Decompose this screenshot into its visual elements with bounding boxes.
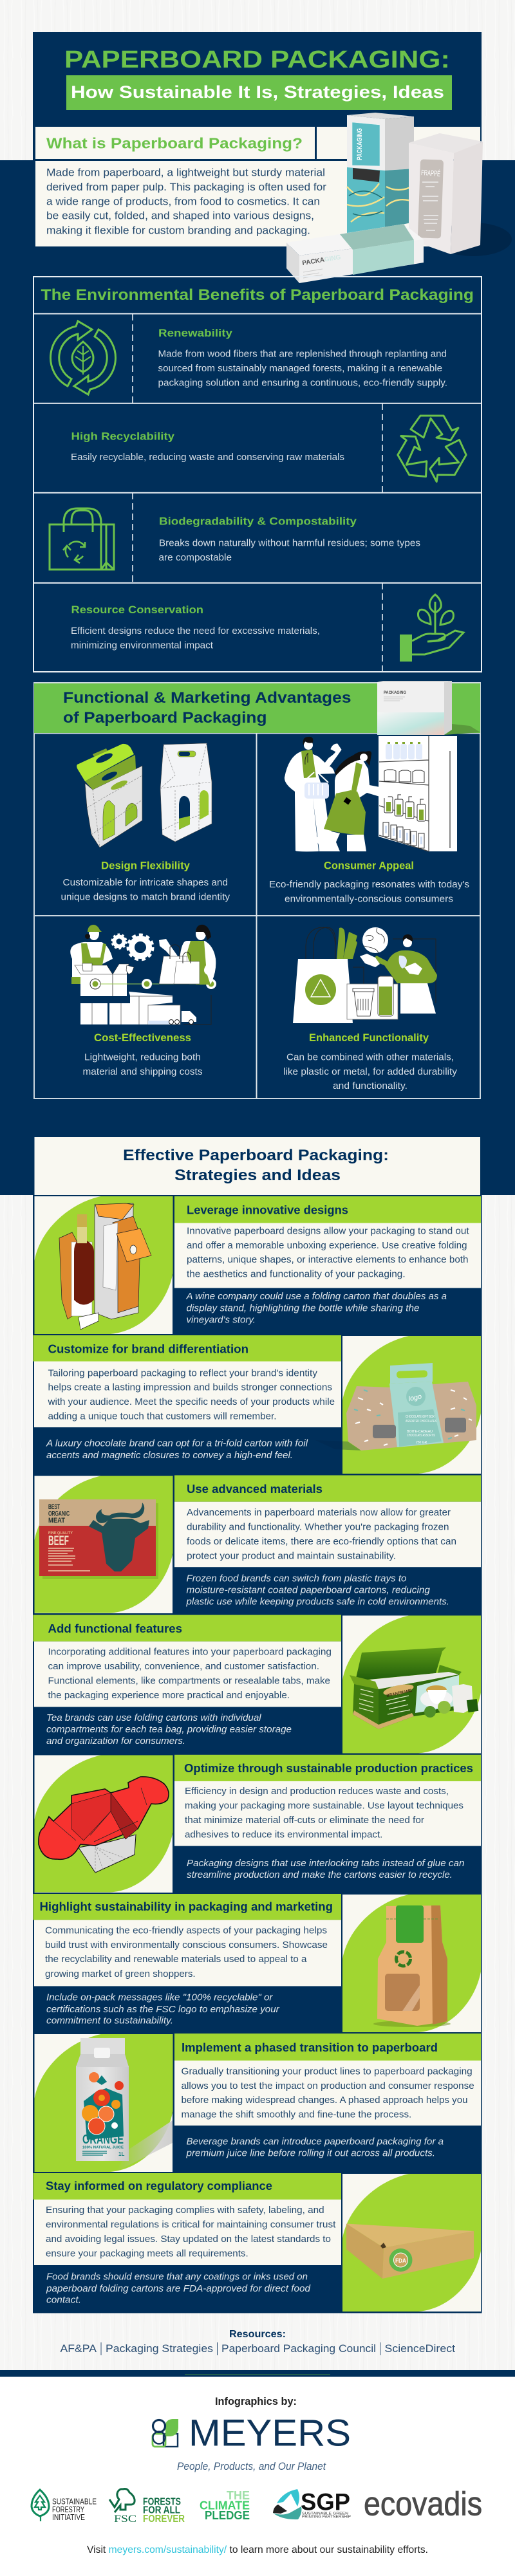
example <box>46 1713 292 1747</box>
illustration: tote bag and globe <box>293 927 437 1023</box>
gears <box>112 934 153 960</box>
text: renewability: sourced from sustainably managed forests, making it a renewable <box>158 364 442 374</box>
logo: sgp: SUSTAINABLE GREEN <box>302 2512 348 2516</box>
image: beef carton: FINE QUALITY <box>48 1532 73 1535</box>
conveyor nodes <box>142 979 216 989</box>
text block: manage the shift smoothly and fine-tune the process. <box>182 2109 411 2120</box>
logo: sgp <box>273 2489 351 2519</box>
frappe box: FRAPPÉ <box>421 167 441 178</box>
image: orange juice carton: ORANGE <box>82 2133 124 2147</box>
text block: Advancements in paperboard materials now allow for greater <box>187 1507 451 1518</box>
text block: build trust with environmentally conscious consumers. Showcase <box>45 1940 328 1951</box>
text block: Communicating the eco-friendly aspects of your packaging helps <box>45 1925 327 1936</box>
warehouse and truck <box>80 992 211 1024</box>
text block: derived from paper pulp. This packaging is often used for <box>46 181 327 193</box>
text block: the recyclability and renewable materials used to appeal to a <box>45 1954 307 1965</box>
image: chocolate gift box: ASSORTED CHOCOLATES <box>406 1420 437 1423</box>
tagline: People, Products, and Our Planet <box>177 2460 326 2472</box>
logo: sustainable forestry initiative: SUSTAINABLE <box>52 2497 97 2507</box>
example: streamline production and make the cartons easier to recycle. <box>187 1870 453 1880</box>
example: Food brands should ensure that any coatings or inks used on <box>46 2272 308 2282</box>
image: chocolate gift box: CHOCOLATS ASSORTIS <box>407 1434 436 1438</box>
text block: Innovative paperboard designs allow your packaging to stand out <box>187 1225 469 1236</box>
illustration: shoppers at store shelf <box>285 736 457 851</box>
logo: meyers: MEYERS <box>189 2413 351 2454</box>
panel: customize for brand differentiation <box>33 1335 481 1474</box>
example: Tea brands can use folding cartons with individual <box>46 1713 261 1723</box>
globe <box>362 927 388 954</box>
bag <box>293 927 357 1023</box>
example: paperboard folding cartons are FDA-approved for direct food <box>46 2284 311 2294</box>
shopper with bags <box>159 925 216 985</box>
example: compartments for each tea bag, providing easier storage <box>46 1725 292 1735</box>
example: plastic use while keeping products safe in cold environments. <box>185 1597 449 1608</box>
image: orange juice carton <box>35 2034 173 2172</box>
text block: that minimize material off-cuts or eliminate the need for <box>185 1815 424 1826</box>
heading: The Environmental Benefits of Paperboard Packaging <box>41 286 474 304</box>
subtitle banner <box>66 75 452 110</box>
text: cost-effectiveness <box>82 1032 202 1077</box>
text block: growing market of green shoppers. <box>45 1969 196 1979</box>
image: chocolate gift box: CHOCOLATE GIFT BOX <box>406 1415 435 1419</box>
panel: use advanced materials <box>35 1475 481 1613</box>
logo: the climate pledge <box>200 2489 250 2522</box>
heading <box>174 1475 481 1502</box>
example: display stand, highlighting the bottle while sharing the <box>187 1303 420 1313</box>
text block: Tailoring paperboard packaging to reflect your brand's identity <box>48 1367 317 1378</box>
example: Include on-pack messages like "100% recyclable" or <box>46 1993 274 2003</box>
logo: sustainable forestry initiative: FORESTRY <box>52 2505 84 2514</box>
image: orange juice carton: 1L <box>118 2151 124 2157</box>
heading banner: of Paperboard Packaging <box>63 709 267 727</box>
text: enhanced functionality: like plastic or metal, for added durability <box>283 1067 458 1077</box>
heading panel: effective packaging strategies: Strategies and Ideas <box>174 1167 341 1184</box>
example: accents and magnetic closures to convey a high-end feel. <box>46 1450 293 1461</box>
text block <box>34 2200 341 2265</box>
icon: recycling symbol <box>390 416 471 488</box>
image: beef carton <box>35 1476 173 1613</box>
text block: making it flexible for custom branding and packaging. <box>46 225 310 236</box>
heading: Leverage innovative designs <box>187 1203 348 1216</box>
text block: Gradually transitioning your product lines to paperboard packaging <box>182 2066 473 2077</box>
panel: what is paperboard packaging <box>35 127 480 246</box>
heading <box>174 1196 481 1223</box>
example: A wine company could use a folding carton that doubles as a <box>185 1292 447 1302</box>
text: biodegradability: are compostable <box>158 553 232 563</box>
header panel <box>33 32 482 161</box>
text: high recyclability: High Recyclability <box>71 431 175 443</box>
logo: the climate pledge: THE <box>227 2489 250 2502</box>
text: high recyclability <box>71 431 344 463</box>
heading: Use advanced materials <box>187 1483 323 1496</box>
text block <box>174 1502 481 1567</box>
example: moisture-resistant coated paperboard cartons, reducing <box>187 1586 430 1596</box>
text: cost-effectiveness: material and shipping costs <box>82 1067 202 1077</box>
image: beef carton: MEAT <box>48 1517 65 1524</box>
text block: durability and functionality. Whether you're packaging frozen <box>187 1522 449 1533</box>
example <box>185 2136 444 2159</box>
icon: shopping bag with arrows <box>50 508 114 570</box>
example: certifications such as the FSC logo to emphasize your <box>46 2005 280 2015</box>
icon: renewal cycle with leaf <box>51 321 115 394</box>
text block: foods or delicate items, there are eco-friendly options that can <box>187 1536 456 1547</box>
resources: Resources: <box>229 2329 286 2340</box>
example: A luxury chocolate brand can opt for a tri-fold carton with foil <box>46 1439 308 1449</box>
text: cost-effectiveness: Cost-Effectiveness <box>94 1032 191 1044</box>
text: resource conservation: minimizing environmental impact <box>71 640 213 651</box>
text: consumer appeal <box>269 860 469 905</box>
text: renewability: Made from wood fibers that are replenished through replanting and <box>158 349 447 360</box>
illustration: banner box: PACKAGING <box>384 691 406 695</box>
logo: sgp: PRINTING PARTNERSHIP <box>302 2516 351 2519</box>
heading banner <box>34 683 480 733</box>
text block: a wide range of products, from food to cosmetics. It can <box>46 196 320 207</box>
text: design flexibility: unique designs to match brand identity <box>61 893 230 903</box>
logo: ecovadis: ecovadis <box>364 2485 482 2523</box>
text block: before making widespread changes. A phased approach helps you <box>182 2095 467 2106</box>
resources <box>61 2329 455 2355</box>
footer band <box>0 2370 515 2377</box>
person <box>360 934 437 1014</box>
heading <box>33 1615 341 1642</box>
image: tea box: BRANDNAME <box>386 1689 413 1698</box>
worker <box>70 925 134 996</box>
example <box>46 1993 280 2026</box>
image: wine carton <box>35 1196 173 1334</box>
heading: Highlight sustainability in packaging and marketing <box>40 1900 333 1913</box>
heading <box>174 1755 481 1781</box>
text: consumer appeal: Eco-friendly packaging resonates with today's <box>269 880 469 890</box>
text block: the packaging experience more practical and enjoyable. <box>48 1690 290 1701</box>
text block: making your packaging more sustainable. Use layout techniques <box>185 1801 464 1812</box>
example <box>46 1439 308 1461</box>
text block <box>174 1223 481 1288</box>
illustration: paperboard boxes <box>286 113 512 283</box>
image: tea box <box>342 1615 481 1753</box>
logo: fsc: FORESTS <box>143 2497 181 2507</box>
panel: regulatory compliance <box>33 2173 481 2312</box>
text: renewability: Renewability <box>158 327 233 339</box>
tall teal box <box>347 113 414 237</box>
text: biodegradability <box>158 515 420 563</box>
panel: add functional features <box>33 1615 481 1753</box>
resources: Packaging Strategies <box>106 2342 213 2355</box>
text: consumer appeal: environmentally-conscious consumers <box>285 894 453 905</box>
text block <box>46 167 327 236</box>
example <box>185 1573 449 1608</box>
heading <box>33 1894 341 1920</box>
image: orange juice carton: 100% NATURAL JUICE <box>82 2146 124 2150</box>
heading <box>33 1335 341 1362</box>
heading: Stay informed on regulatory compliance <box>46 2180 272 2192</box>
heading: Optimize through sustainable production practices <box>184 1762 473 1775</box>
text: resource conservation: Resource Conservation <box>71 604 203 616</box>
resources: Paperboard Packaging Council <box>221 2342 376 2355</box>
text block: Ensuring that your packaging complies with safety, labeling, and <box>46 2205 324 2216</box>
text block <box>174 1781 481 1846</box>
image: kraft box with fda seal <box>342 2174 481 2312</box>
logo: fsc <box>109 2489 185 2525</box>
credit heading: Infographics by: <box>215 2395 297 2407</box>
text: enhanced functionality: Enhanced Functionality <box>309 1032 429 1044</box>
text block: and avoiding legal issues. Stay updated on the latest standards to <box>46 2234 331 2245</box>
text: enhanced functionality <box>283 1032 458 1091</box>
heading: Customize for brand differentiation <box>48 1342 248 1355</box>
example: Frozen food brands can switch from plastic trays to <box>187 1573 407 1584</box>
heading: What is Paperboard Packaging? <box>46 135 303 152</box>
example: Packaging designs that use interlocking tabs instead of glue can <box>187 1858 464 1869</box>
text: renewability <box>158 327 447 389</box>
text block: be easily cut, folded, and shaped into various designs, <box>46 210 314 222</box>
text block <box>174 2061 481 2126</box>
image: red carton <box>35 1756 173 1893</box>
panel: environmental benefits <box>33 277 482 672</box>
image: chocolate gift box: logo <box>407 1393 422 1403</box>
resources: ScienceDirect <box>385 2342 455 2355</box>
text block: Made from paperboard, a lightweight but sturdy material <box>46 167 325 178</box>
panel: leverage innovative designs <box>35 1196 481 1334</box>
image: kraft bag <box>342 1895 481 2032</box>
subtitle banner: How Sustainable It Is, Strategies, Ideas <box>71 82 444 102</box>
image: kraft box with fda seal: FDA <box>395 2257 406 2264</box>
logo: the climate pledge: CLIMATE <box>200 2499 250 2512</box>
strategy section backdrop <box>33 1195 482 2313</box>
logo: sustainable forestry initiative <box>32 2490 97 2522</box>
text: high recyclability: Easily recyclable, reducing waste and conserving raw materials <box>71 452 344 463</box>
text block: Efficiency in design and production reduces waste and costs, <box>185 1786 449 1797</box>
conveyor line <box>100 983 207 985</box>
example: vineyard's story. <box>187 1315 256 1326</box>
text block: patterns, unique shapes, or interactive elements to enhance both <box>187 1254 469 1265</box>
example: commitment to sustainability. <box>46 2016 173 2026</box>
text: design flexibility: Design Flexibility <box>101 860 191 871</box>
text block: Functional elements, like compartments or resealable tabs, make <box>48 1675 330 1686</box>
text block: allows you to test the impact on production and consumer response <box>182 2080 474 2091</box>
text block: Incorporating additional features into your paperboard packaging <box>48 1646 332 1657</box>
logo: fsc: FOREVER <box>143 2514 185 2525</box>
flat packaging box: PACKAGING <box>302 254 341 267</box>
example <box>185 1292 447 1326</box>
panel: highlight sustainability <box>33 1894 481 2032</box>
text: enhanced functionality: and functionality. <box>333 1081 407 1091</box>
shelf <box>379 736 457 851</box>
text block: protect your product and maintain sustainability. <box>187 1551 396 1562</box>
text block: helps create a lasting impression and builds stronger connections <box>48 1382 332 1393</box>
text block <box>34 1642 341 1707</box>
man <box>285 737 341 851</box>
text block: with your audience. Meet the specific needs of your products while <box>47 1396 335 1407</box>
text block <box>34 1920 341 1986</box>
woman <box>315 751 391 851</box>
example: contact. <box>46 2295 81 2306</box>
image: beef carton: BEST <box>48 1503 60 1511</box>
title: PAPERBOARD PACKAGING: <box>64 46 450 73</box>
heading banner: Functional & Marketing Advantages <box>63 689 351 707</box>
text: consumer appeal: Consumer Appeal <box>324 860 414 871</box>
example: premium juice line before rolling it out across all products. <box>185 2149 435 2159</box>
text block: adhesives to reduce its environmental impact. <box>185 1830 382 1840</box>
text block: environmental regulations is critical for maintaining consumer trust <box>46 2219 336 2230</box>
illustration: banner box <box>377 681 480 735</box>
closing note: Visit meyers.com/sustainability/ to learn more about our sustainability efforts. <box>87 2544 428 2555</box>
tall teal box: PACKAGING <box>356 128 364 160</box>
panel: phased transition <box>35 2034 481 2172</box>
heading <box>33 2173 341 2200</box>
text: resource conservation <box>71 604 320 651</box>
logo: sgp: SGP <box>301 2489 350 2515</box>
text: resource conservation: Efficient designs reduce the need for excessive materials, <box>71 626 320 636</box>
example <box>46 2272 311 2306</box>
image: chocolate gift box <box>315 1336 481 1474</box>
panel: sustainable production practices <box>35 1755 481 1893</box>
illustration: factory workers and shipping <box>70 925 216 1024</box>
frappe box <box>409 133 483 254</box>
flat packaging box <box>286 224 424 283</box>
logo: sustainable forestry initiative: INITIATIVE <box>52 2512 85 2522</box>
text block <box>34 1362 341 1427</box>
text: design flexibility: Customizable for intricate shapes and <box>63 878 228 888</box>
image: beef carton: ORGANIC <box>48 1510 70 1518</box>
text: enhanced functionality: Can be combined with other materials, <box>286 1052 454 1062</box>
jar and cup card <box>347 939 436 1019</box>
text block: and offer a memorable unboxing experience. Use creative folding <box>187 1240 467 1251</box>
text block: adding a unique touch that customers will remember. <box>48 1411 276 1422</box>
text block: can improve usability, convenience, and customer satisfaction. <box>48 1661 319 1672</box>
text: design flexibility <box>61 860 230 903</box>
image: chocolate gift box: 250 GR <box>416 1441 427 1445</box>
text: biodegradability: Biodegradability & Compostability <box>159 515 357 528</box>
resources: AF&PA <box>61 2342 97 2355</box>
logo: fsc: FOR ALL <box>143 2505 180 2516</box>
panel: functional and marketing advantages <box>34 681 480 1098</box>
heading: Add functional features <box>48 1622 182 1635</box>
text: renewability: packaging solution and ensuring a continuous, eco-friendly supply. <box>158 378 447 389</box>
heading panel: effective packaging strategies <box>35 1137 480 1195</box>
image: chocolate gift box: BOITE-CADEAU <box>407 1430 433 1434</box>
example: and organization for consumers. <box>46 1736 185 1747</box>
heading: Implement a phased transition to paperboard <box>182 2041 438 2054</box>
text block: ensure your packaging meets all requirements. <box>46 2248 248 2259</box>
text: biodegradability: Breaks down naturally without harmful residues; some types <box>159 539 420 549</box>
logo: fsc: FSC <box>114 2514 136 2525</box>
logo: the climate pledge: PLEDGE <box>205 2509 250 2522</box>
text: cost-effectiveness: Lightweight, reducing both <box>84 1052 201 1062</box>
heading panel: effective packaging strategies: Effective Paperboard Packaging: <box>123 1147 389 1164</box>
heading <box>174 2034 481 2061</box>
icon: hand holding plant <box>400 595 464 662</box>
example: Beverage brands can introduce paperboard packaging for a <box>187 2136 444 2147</box>
example <box>187 1858 464 1880</box>
image: beef carton: BEEF <box>48 1534 69 1548</box>
text block: the aesthetics and functionality of your packaging. <box>187 1269 406 1280</box>
illustration: folding gift cartons <box>77 743 212 848</box>
